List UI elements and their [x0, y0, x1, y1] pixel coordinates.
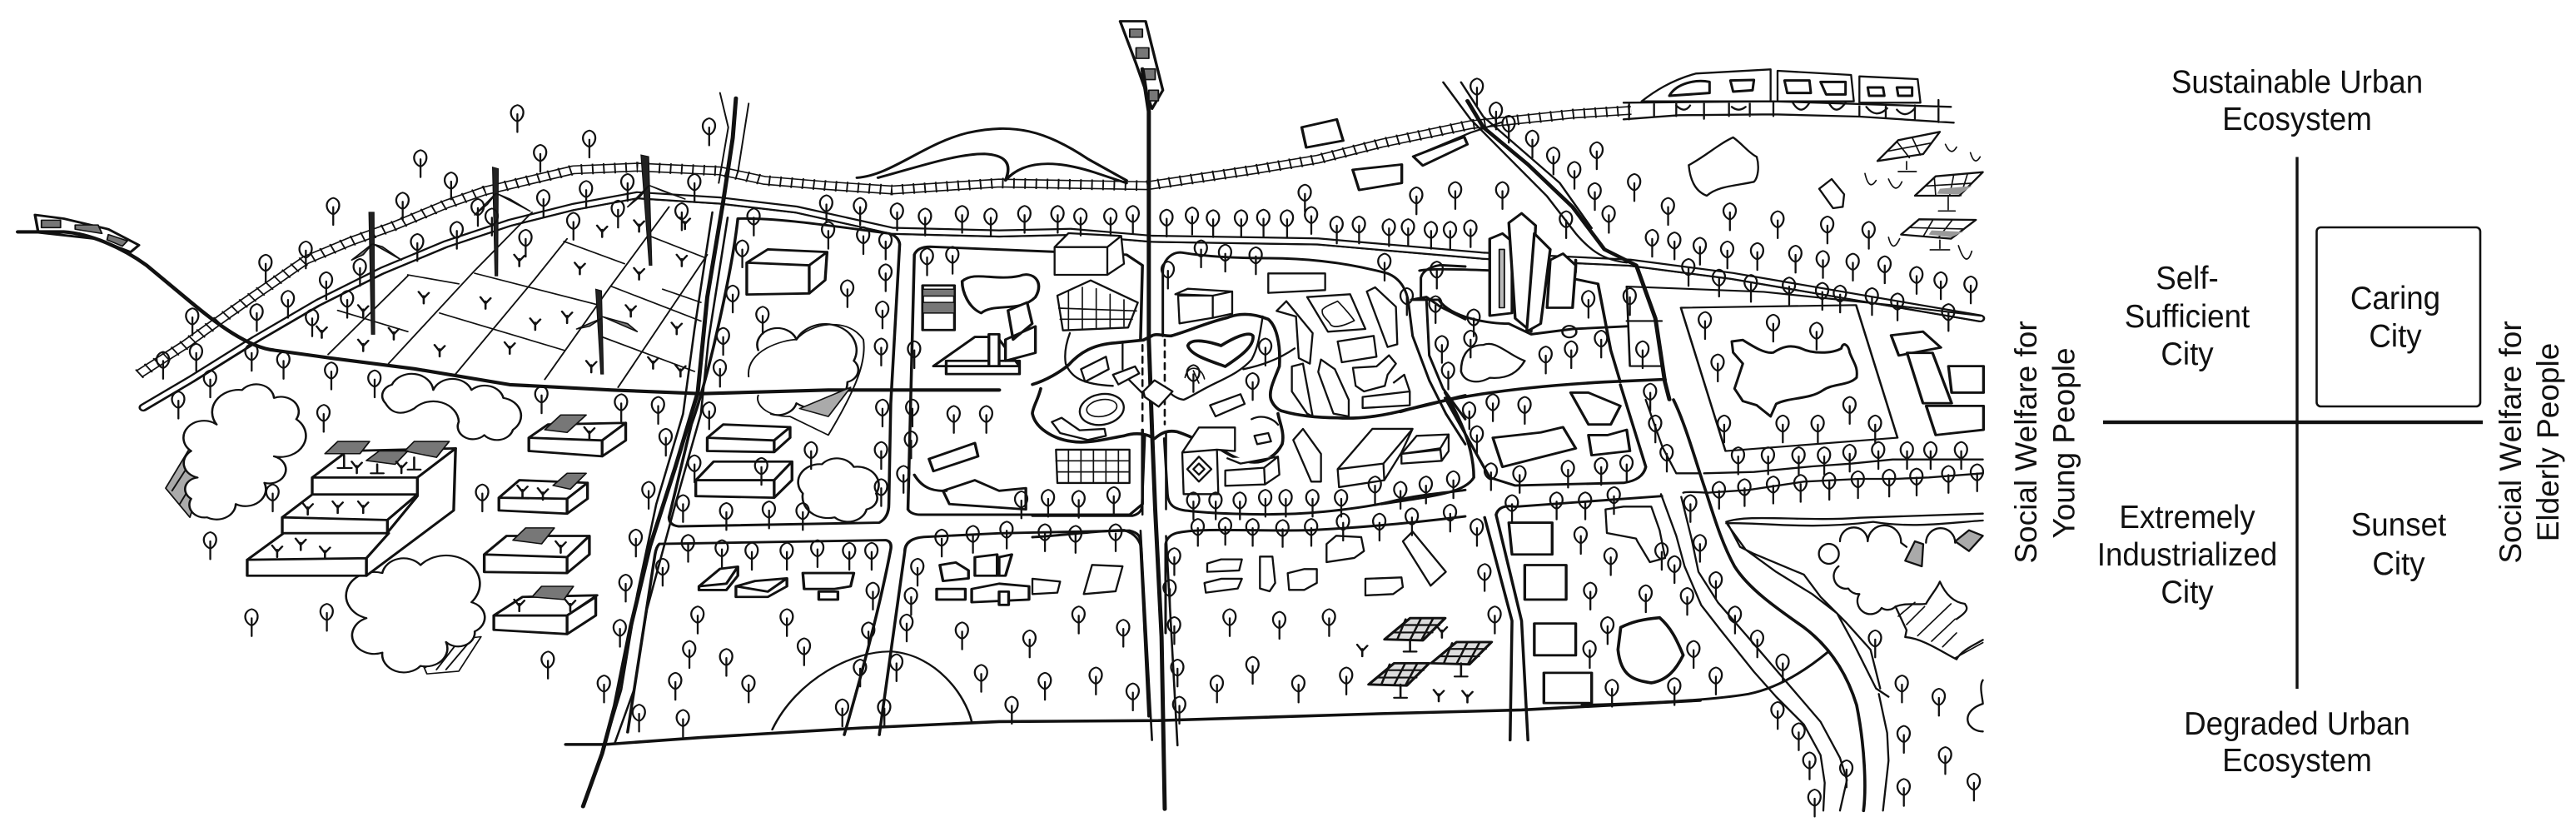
crop sprouts — [316, 217, 690, 376]
towers and east-central blocks — [1381, 213, 1665, 504]
heading: bottom axis label: Degraded Urban — [2184, 705, 2410, 741]
quadrant label: Self-Sufficient City: Self- — [2156, 260, 2219, 296]
heading: top axis label: Ecosystem — [2222, 101, 2372, 137]
axis label: Social Welfare for Young People: Young People — [2046, 347, 2081, 539]
quadrant label: Extremely Industrialized City: Extremely — [2119, 499, 2255, 535]
block below with small buildings and dome — [628, 535, 972, 737]
west-of-axis buildings — [1032, 233, 1172, 594]
axis label: Social Welfare for Elderly People — [2494, 321, 2565, 564]
quadrant label: Caring City: City — [2369, 318, 2422, 354]
quadrant label: Caring City: Caring — [2350, 280, 2440, 316]
north-east detail — [1624, 69, 1983, 416]
four small farmed blocks — [485, 415, 626, 634]
central north-south road — [1141, 69, 1177, 810]
east district detail — [1582, 400, 1983, 810]
quadrant label: Extremely Industrialized City — [2097, 499, 2277, 610]
north train on central line — [1120, 21, 1163, 109]
south-east park — [1819, 526, 1983, 731]
pond — [1618, 618, 1683, 683]
upper central building cluster — [1176, 273, 1410, 416]
axis label: Social Welfare for Young People: Social Welfare for — [2009, 321, 2043, 564]
highlight box: Caring City quadrant — [2316, 227, 2480, 406]
eastern half of the plan — [999, 21, 1983, 810]
heading: bottom axis label — [2184, 705, 2410, 778]
solar panels — [1877, 132, 1983, 250]
main cross road winding from the train across the farm — [17, 232, 999, 394]
tree-lined dual road — [1661, 494, 1847, 810]
quadrant label: Sunset City — [2351, 506, 2447, 581]
quadrant label: Caring City — [2350, 280, 2440, 354]
lake park boundary — [1627, 286, 1897, 451]
railway with ties — [139, 111, 1631, 374]
farm grid — [328, 207, 707, 387]
north-south road west — [583, 92, 748, 806]
block with housing cluster — [878, 526, 1149, 735]
north arch structure — [857, 128, 1126, 183]
bottom road junction — [1582, 652, 1828, 705]
quadrant label: Sunset City: City — [2372, 546, 2425, 581]
quadrant label: Self-Sufficient City — [2125, 260, 2250, 371]
map: sketched city plan — [17, 21, 1983, 810]
east avenues — [1646, 400, 1983, 493]
quadrant label: Self-Sufficient City: Sufficient — [2125, 298, 2250, 334]
axis: social welfare (horizontal) — [2103, 421, 2483, 424]
southern blocks — [999, 496, 1662, 740]
lower central building cluster — [1182, 417, 1449, 494]
west parks — [166, 374, 521, 674]
trees west — [157, 105, 997, 732]
quadrant label: Extremely Industrialized City: Industrialized — [2097, 536, 2277, 572]
block one with housing and park — [669, 208, 900, 530]
quadrant label: Sunset City: Sunset — [2351, 506, 2447, 542]
quadrant label: Extremely Industrialized City: City — [2161, 574, 2214, 610]
river channel — [1726, 514, 1983, 810]
axis label: Social Welfare for Elderly People: Elderly People — [2531, 343, 2565, 541]
heading: top axis label — [2171, 64, 2423, 137]
block roads — [1032, 252, 1465, 633]
trees east — [1000, 78, 1983, 816]
diagonal double road and upper ring road — [1413, 82, 1981, 400]
bottom ring road — [566, 700, 1700, 745]
axis label: Social Welfare for Elderly People: Social Welfare for — [2494, 321, 2528, 564]
small building — [1819, 179, 1844, 208]
pond — [1688, 137, 1758, 196]
wind turbines — [351, 155, 685, 374]
central district detail — [1032, 233, 1465, 633]
east train — [1642, 69, 1921, 114]
lake — [1732, 340, 1857, 416]
heading: top axis label: Sustainable Urban — [2171, 64, 2423, 100]
sprouts by the panels — [1865, 144, 1980, 259]
stepped terrace farm — [247, 441, 455, 575]
east rail track — [1624, 100, 1954, 122]
quadrant label: Self-Sufficient City: City — [2161, 336, 2214, 371]
central block west — [897, 247, 1142, 515]
main ring road — [1673, 400, 1865, 810]
southern small buildings — [1205, 531, 1446, 595]
west train — [35, 215, 139, 252]
heading: bottom axis label: Ecosystem — [2222, 742, 2372, 778]
axis label: Social Welfare for Young People — [2009, 321, 2081, 564]
east edge buildings — [1891, 331, 1983, 435]
dual carriageway along the north edge — [143, 195, 1981, 411]
axis: ecosystem quality (vertical) — [2295, 157, 2299, 689]
plaza loop roads — [1032, 314, 1465, 462]
north-east field: small buildings — [1302, 119, 1467, 190]
L-shaped building — [1605, 506, 1665, 562]
